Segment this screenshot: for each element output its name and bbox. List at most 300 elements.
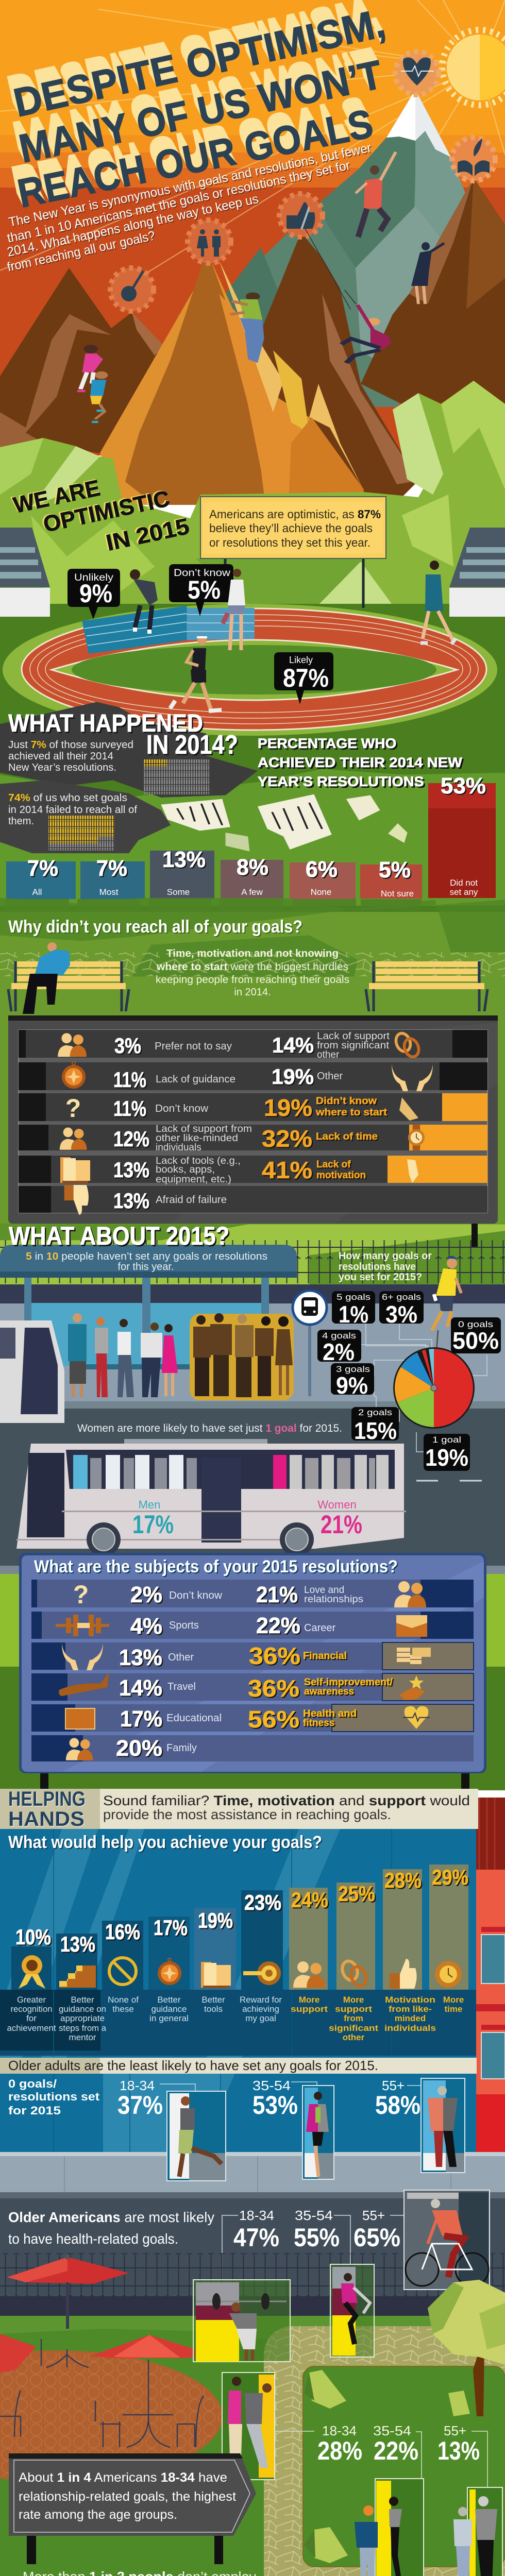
rock: 7% panel — [0, 702, 258, 798]
banner: helping hands: Sound familiar? Time, motivation and support would — [103, 1793, 470, 1808]
bus — [16, 1439, 406, 1556]
bar labels: highlighted: individuals — [384, 2023, 436, 2033]
row 3: where to start — [315, 1107, 388, 1118]
stat: 18-34 37%: 37% — [117, 2091, 163, 2120]
stats: health goals by age: 55+ — [362, 2208, 385, 2223]
stats: health goals by age: 65% — [354, 2223, 400, 2252]
heading: percentage who achieved: ACHIEVED THEIR 2014 NEW — [258, 755, 462, 770]
intro text: from reaching all our goals? — [6, 229, 157, 275]
stats: relationship goals: 28% — [317, 2436, 362, 2465]
stat: 35-54 53% — [252, 2078, 317, 2120]
bar 25%: 25% — [338, 1882, 375, 1906]
row 1: other — [317, 1049, 340, 1060]
bar 16%: 16% — [105, 1920, 140, 1944]
intro text: The New Year is synonymous with goals and resolutions, but fewer — [8, 141, 373, 230]
text: 74% failed — [8, 792, 137, 827]
row: other / financial: Other — [168, 1652, 194, 1663]
row 4 — [19, 1124, 487, 1153]
bar 28%: 28% — [384, 1868, 422, 1892]
row 5: Lack of — [316, 1159, 351, 1170]
bar labels: None of — [108, 1995, 139, 2005]
bar 23% — [241, 1890, 283, 1990]
bar labels: these — [112, 2004, 134, 2014]
text: biggest hurdles: Time, motivation and not knowing — [166, 948, 339, 959]
callout: 2 goals — [351, 1407, 399, 1444]
text: how many goals: resolutions have — [339, 1261, 416, 1273]
heading: what happened: WHAT HAPPENED — [8, 710, 203, 737]
bar labels: highlighted: More — [299, 1995, 319, 2005]
bar: all 7%: 7% — [27, 856, 58, 881]
text: how many goals — [339, 1250, 432, 1283]
background: why section grass — [0, 898, 505, 1231]
text: older americans health: to have health-related goals. — [8, 2231, 178, 2247]
bar labels: Better — [157, 1995, 181, 2005]
bar labels: mentor — [69, 2032, 96, 2042]
bar labels: highlighted: minded — [395, 2013, 426, 2023]
bar 24%: 24% — [291, 1888, 328, 1912]
row: sports / career: 22% — [256, 1613, 300, 1638]
sign: 1 in 4: relationship-related goals, the highest — [19, 2489, 236, 2504]
mountain: grey-green main peak — [225, 90, 479, 407]
icon: bus stop sign — [293, 1291, 327, 1396]
icon: guitar — [110, 268, 154, 311]
bar: did not set any 53%: set any — [450, 887, 478, 897]
text: 0 goals — [8, 2077, 100, 2117]
row 1: 14% — [272, 1033, 314, 1057]
callout: 2 goals: 15% — [354, 1417, 397, 1444]
fence — [0, 1240, 505, 1283]
bar labels: Reward for — [240, 1995, 282, 2005]
background: lower hill — [0, 769, 505, 906]
people array: 7% — [143, 759, 209, 794]
bar 19% — [194, 1908, 236, 1990]
men 17%: 17% — [132, 1510, 174, 1539]
callout: 5 goals — [332, 1291, 375, 1328]
bar: none 6% — [290, 857, 356, 899]
row 4: Lack of support from — [156, 1124, 252, 1134]
text: 5 in 10: 5 in 10 people haven’t set any goals or resolutions — [26, 1251, 267, 1262]
climbers: woman and child — [77, 345, 108, 422]
stat: 35-54 53%: 53% — [252, 2091, 298, 2120]
row: educational / health: Educational — [166, 1713, 222, 1724]
bar 24% — [289, 1888, 328, 1990]
bar: most 7% — [80, 856, 145, 899]
unicycle rider — [432, 1256, 461, 1388]
sign: 1 in 4 — [9, 2453, 256, 2564]
callout: 6+ goals: 6+ goals — [382, 1292, 421, 1302]
stat: 35-54 53%: 35-54 — [252, 2078, 291, 2093]
bar labels: Greater — [17, 1995, 46, 2005]
bar labels: highlighted: significant — [329, 2023, 378, 2033]
bar labels: highlighted: time — [445, 2004, 462, 2014]
row 3: 11% — [113, 1096, 146, 1121]
heading: percentage who achieved: YEAR’S RESOLUTIONS — [258, 774, 424, 789]
heading: what happened: IN 2014? — [146, 730, 238, 760]
bar 29% — [429, 1865, 468, 1990]
row: travel / self-improvement — [31, 1672, 474, 1702]
stats: health goals by age: 35-54 — [295, 2208, 333, 2223]
figure: older man box — [421, 2078, 465, 2173]
row: don't know / love: relationships — [304, 1594, 363, 1605]
figure box: cyclist — [404, 2190, 490, 2290]
row 4: other like-minded — [156, 1133, 238, 1144]
row: sports / career: Sports — [169, 1620, 199, 1631]
mountain: brown right — [361, 178, 505, 417]
row 3: Didn’t know — [316, 1096, 377, 1107]
athlete: bending woman — [130, 569, 158, 634]
row 6 — [19, 1185, 487, 1215]
fence lower — [0, 2253, 505, 2296]
row 3: ? — [65, 1094, 81, 1123]
bar chart: what would help — [11, 1865, 468, 1990]
bar labels: steps from a — [59, 2023, 107, 2033]
bar 13%: 13% — [60, 1932, 95, 1956]
sign: 1 in 4: rate among the age groups. — [19, 2507, 177, 2522]
callout: don't know 5%: 5% — [188, 575, 221, 604]
bar 13% — [56, 1932, 97, 1990]
bar: did not set any 53%: Did not — [450, 878, 478, 888]
mountain: brown left — [0, 268, 164, 453]
bar labels: highlighted: More — [343, 1995, 364, 2005]
bar: not sure 5% — [360, 857, 422, 899]
banner: helping hands: provide the most assistance in reaching goals. — [103, 1807, 391, 1822]
sidewalk and road — [0, 2152, 505, 2316]
text: how many goals: How many goals or — [339, 1250, 432, 1262]
bar: some 13%: Some — [167, 887, 190, 897]
row 2 — [19, 1062, 487, 1092]
bar labels: highlighted: Motivation — [385, 1995, 435, 2005]
row 4: 32% — [262, 1125, 312, 1152]
bar labels: Better — [71, 1995, 94, 2005]
row 5 — [19, 1156, 487, 1185]
heading: we are optimistic: OPTIMISTIC — [41, 486, 172, 537]
figure box: couple 18-34 — [222, 2372, 275, 2480]
stat: 18-34 37% — [117, 2078, 195, 2120]
text: how many goals: you set for 2015? — [339, 1272, 422, 1283]
row: educational / health: fitness — [303, 1718, 334, 1728]
figure box: weightlifter — [193, 2280, 290, 2362]
sign: 87% optimistic — [200, 497, 386, 558]
train at stop — [0, 1320, 64, 1423]
umbrella lower — [0, 2334, 211, 2372]
text: biggest hurdles: in 2014. — [234, 987, 271, 998]
row 4: individuals — [156, 1142, 201, 1153]
callout: 0 goals: 50% — [452, 1327, 499, 1354]
bar labels: Better — [201, 1995, 225, 2005]
row 5: motivation — [316, 1170, 366, 1181]
patio — [0, 2350, 223, 2482]
people waiting: five highlighted — [190, 1313, 294, 1400]
row 5: 41% — [262, 1157, 312, 1183]
sign: 87% optimistic: Americans are optimistic, as 87% — [209, 507, 381, 521]
rock: 74% panel — [0, 780, 171, 853]
row 3: 19% — [264, 1094, 312, 1121]
callout: 1 goal: 19% — [425, 1444, 468, 1471]
stats: relationship goals: 13% — [437, 2436, 480, 2465]
blue building — [0, 1829, 476, 2152]
row 1: from significant — [317, 1040, 390, 1051]
bar labels: appropriate — [60, 2013, 105, 2023]
text: biggest hurdles: where to start were the biggest hurdles — [156, 961, 348, 973]
panel title: What are the subjects of your 2015 resolutions? — [34, 1557, 398, 1577]
figure box: couple 35-54 — [355, 2479, 424, 2576]
bar labels: in general — [149, 2013, 189, 2023]
heading: what happened — [8, 710, 238, 760]
background: green hills — [0, 381, 505, 618]
heading: why didn't you reach: Why didn’t you reach all of your goals? — [8, 917, 302, 937]
bar: a few 8% — [221, 855, 283, 899]
background: lime strip — [0, 1224, 505, 1285]
stats: health goals by age: 55% — [294, 2223, 340, 2252]
row: travel / self-improvement: Self-improvement/ — [304, 1677, 393, 1688]
bar: all 7%: All — [32, 887, 42, 897]
row: educational / health — [31, 1704, 474, 1733]
heading: percentage who achieved: PERCENTAGE WHO — [258, 736, 396, 751]
sign: 87% optimistic: believe they’ll achieve the goals — [209, 521, 373, 535]
stats: relationship goals: 35-54 — [373, 2423, 411, 2438]
text: biggest hurdles — [156, 948, 349, 998]
connector lines — [361, 1324, 487, 1452]
row 1: 3% — [114, 1033, 141, 1058]
callout: 4 goals — [317, 1330, 361, 1365]
women 21%: Women — [317, 1498, 357, 1511]
callout: 6+ goals — [379, 1291, 424, 1328]
icon: couple — [188, 220, 231, 263]
figure: jogger box — [167, 2091, 226, 2181]
stat: 55+ 58%: 55+ — [382, 2078, 405, 2093]
intro text: 2014. What happens along the way to keep us — [6, 192, 260, 260]
people array: 74% — [48, 816, 114, 851]
track: likely-not segments — [82, 606, 187, 654]
stat: 55+ 58% — [375, 2078, 421, 2120]
row: educational / health: 56% — [248, 1706, 299, 1733]
row 1: Lack of support — [317, 1031, 390, 1042]
bar chart: 2014 achievement — [5, 773, 496, 911]
heading: we are optimistic: WE ARE — [11, 475, 102, 518]
mountain: orange centre — [100, 260, 364, 505]
bar: most 7%: Most — [99, 887, 119, 897]
sign: 1 in 4: About 1 in 4 Americans 18-34 have — [19, 2470, 227, 2485]
callout: unlikely 9%: 9% — [79, 579, 112, 608]
bar labels: recognition — [10, 2004, 53, 2014]
row: travel / self-improvement: 14% — [119, 1675, 162, 1701]
text: 0 goals: 0 goals/ — [8, 2077, 57, 2090]
climber: magenta shirt — [341, 290, 391, 363]
text: 7% achieved: achieved all their 2014 — [8, 751, 113, 762]
row: other / financial — [31, 1642, 474, 1670]
text: 7% achieved: Just 7% of those surveyed — [8, 739, 133, 751]
bar: not sure 5%: 5% — [379, 857, 411, 883]
bar: not sure 5%: Not sure — [381, 889, 414, 899]
row 1 — [19, 1030, 487, 1060]
bleachers left — [0, 528, 50, 617]
row: family: Family — [166, 1742, 197, 1754]
billboard: reasons — [8, 1015, 498, 1224]
text: older americans health — [8, 2209, 214, 2247]
heading: what about 2015: WHAT ABOUT 2015? — [9, 1222, 229, 1250]
callout: likely 87%: 87% — [283, 664, 329, 692]
athlete: right runner — [420, 561, 456, 644]
row 3 — [19, 1093, 487, 1123]
bar 25% — [336, 1882, 375, 1990]
text: 7% achieved: New Year’s resolutions. — [8, 762, 116, 773]
bar labels: my goal — [245, 2013, 276, 2023]
row: travel / self-improvement: awareness — [304, 1686, 354, 1697]
icon: open book and quill — [452, 138, 495, 181]
stats: health goals by age: 47% — [233, 2223, 279, 2252]
text: 74% failed: 74% of us who set goals — [8, 792, 127, 804]
callout: 5 goals: 5 goals — [336, 1292, 371, 1302]
row 3: Don’t know — [155, 1103, 209, 1114]
row: sports / career — [31, 1612, 474, 1639]
row 1: Prefer not to say — [155, 1041, 232, 1052]
bar labels: for — [26, 2013, 37, 2023]
heading: we are optimistic — [10, 475, 192, 556]
men 17%: Men — [139, 1498, 160, 1511]
red building right — [476, 1798, 505, 2153]
bar 17% — [148, 1916, 190, 1990]
callout: 2 goals: 2 goals — [358, 1408, 392, 1417]
panel: subjects of resolutions — [19, 1553, 486, 1773]
callout: unlikely 9% — [68, 569, 120, 619]
heading: what would help: What would help you achieve your goals? — [8, 1833, 322, 1852]
text: biggest hurdles: keeping people from reaching their goals — [156, 974, 349, 986]
climber: dark dress — [411, 242, 444, 304]
text: 74% failed: them. — [8, 816, 34, 827]
row: family: 20% — [116, 1736, 162, 1761]
callout: likely 87% — [274, 652, 333, 704]
icon: sun — [442, 30, 505, 105]
callout: don't know 5%: Don’t know — [174, 568, 230, 579]
stat: 55+ 58%: 58% — [375, 2091, 420, 2120]
row 2: Lack of guidance — [156, 1074, 235, 1085]
text: 7% achieved — [8, 739, 133, 773]
people waiting: five light — [68, 1313, 178, 1397]
text: 74% failed: in 2014 failed to reach all of — [8, 804, 137, 816]
bar: a few 8%: 8% — [237, 855, 268, 880]
intro text: than 1 in 10 Americans met the goals or resolutions they set for — [6, 158, 351, 246]
women 21% — [317, 1498, 362, 1539]
bar labels: highlighted: other — [343, 2032, 365, 2042]
bus shelter — [0, 1245, 297, 1369]
bar labels: highlighted: from like- — [389, 2004, 432, 2014]
callout: 0 goals: 0 goals — [458, 1319, 493, 1329]
bar labels: tools — [204, 2004, 223, 2014]
row 5: books, apps, — [156, 1164, 215, 1175]
bar 23%: 23% — [244, 1890, 281, 1914]
bar 10% — [11, 1925, 52, 1990]
bar labels: achievement — [7, 2023, 56, 2033]
icon: thumbs up — [279, 194, 323, 237]
row: travel / self-improvement: 36% — [248, 1675, 299, 1702]
heading: percentage who achieved — [258, 736, 464, 789]
stats: relationship goals: 22% — [374, 2436, 418, 2465]
text: 5 in 10 — [26, 1251, 267, 1273]
bar labels: highlighted: support — [335, 2004, 372, 2014]
bleachers right — [449, 528, 505, 617]
title — [7, 0, 389, 216]
row: don't know / love: Don’t know — [169, 1590, 223, 1601]
stats: health goals by age — [233, 2208, 400, 2252]
row: sports / career: 4% — [130, 1614, 162, 1639]
running track — [3, 604, 497, 736]
bar 29%: 29% — [432, 1865, 468, 1889]
text: women more likely: Women are more likely to have set just 1 goal for 2015. — [77, 1422, 342, 1434]
bar labels: guidance — [151, 2004, 187, 2014]
callout: 6+ goals: 3% — [385, 1301, 417, 1328]
bar labels: guidance on — [59, 2004, 106, 2014]
stats: health goals by age: 18-34 — [239, 2208, 274, 2223]
connector lines — [222, 2215, 404, 2280]
row: travel / self-improvement: Travel — [167, 1681, 196, 1692]
callout: 4 goals: 4 goals — [322, 1331, 356, 1341]
row: don't know / love: Love and — [304, 1585, 344, 1596]
text: 0 goals: for 2015 — [8, 2104, 61, 2117]
row 4: Lack of time — [316, 1131, 378, 1142]
row 2: 19% — [272, 1064, 314, 1089]
umbrella upper — [7, 2255, 129, 2329]
banner: helping hands: HANDS — [8, 1808, 85, 1831]
callout: 3 goals: 9% — [336, 1372, 368, 1399]
paper scraps — [161, 794, 408, 852]
callout: 1 goal: 1 goal — [432, 1435, 461, 1445]
row: don't know / love: 21% — [256, 1582, 298, 1607]
athlete: front runner — [170, 636, 222, 711]
row 5: 13% — [113, 1158, 149, 1182]
row: other / financial: 13% — [119, 1645, 162, 1670]
banner: helping hands — [0, 1788, 478, 1831]
callout: 3 goals — [331, 1363, 374, 1399]
callout: 1 goal — [424, 1434, 470, 1471]
bar: some 13% — [150, 847, 214, 899]
figure box: couple 55+ — [453, 2487, 502, 2576]
callout: likely 87%: Likely — [289, 655, 313, 665]
garden path — [264, 2326, 505, 2576]
banner: older adults: Older adults are the least likely to have set any goals for 2015. — [8, 2058, 378, 2073]
row: educational / health: Health and — [303, 1708, 357, 1719]
row 6: 13% — [113, 1189, 149, 1213]
stats: relationship goals: 18-34 — [322, 2423, 357, 2438]
bar 28% — [383, 1868, 422, 1990]
bar 16% — [102, 1920, 143, 1990]
title: REACH OUR GOALS — [14, 100, 377, 216]
bar labels — [7, 1995, 282, 2042]
text: older americans health: Older Americans are most likely — [8, 2209, 214, 2225]
bar: none 6%: None — [311, 887, 331, 897]
callout: unlikely 9%: Unlikely — [74, 572, 114, 583]
bar: did not set any 53%: 53% — [441, 773, 486, 799]
bar: some 13%: 13% — [162, 847, 206, 872]
mountain: brown middle — [259, 232, 418, 497]
bar 10%: 10% — [15, 1925, 51, 1949]
row: don't know / love: ? — [73, 1580, 89, 1609]
bench: left with man — [8, 942, 129, 1014]
background: park — [0, 2316, 505, 2576]
bar: most 7%: 7% — [96, 856, 127, 881]
bar 19%: 19% — [198, 1908, 233, 1933]
banner: helping hands: HELPING — [8, 1788, 86, 1810]
stats: relationship goals: 55+ — [444, 2423, 466, 2438]
callout: 3 goals: 3 goals — [336, 1364, 370, 1374]
intro text — [6, 141, 373, 275]
climber: red shirt — [356, 152, 396, 237]
sign posts — [225, 558, 363, 608]
bar labels: highlighted: More — [443, 1995, 464, 2005]
bar labels: achieving — [242, 2004, 279, 2014]
panel posts — [44, 1772, 465, 1789]
text: 0 goals: resolutions set — [8, 2090, 100, 2103]
tree right — [428, 2280, 505, 2416]
